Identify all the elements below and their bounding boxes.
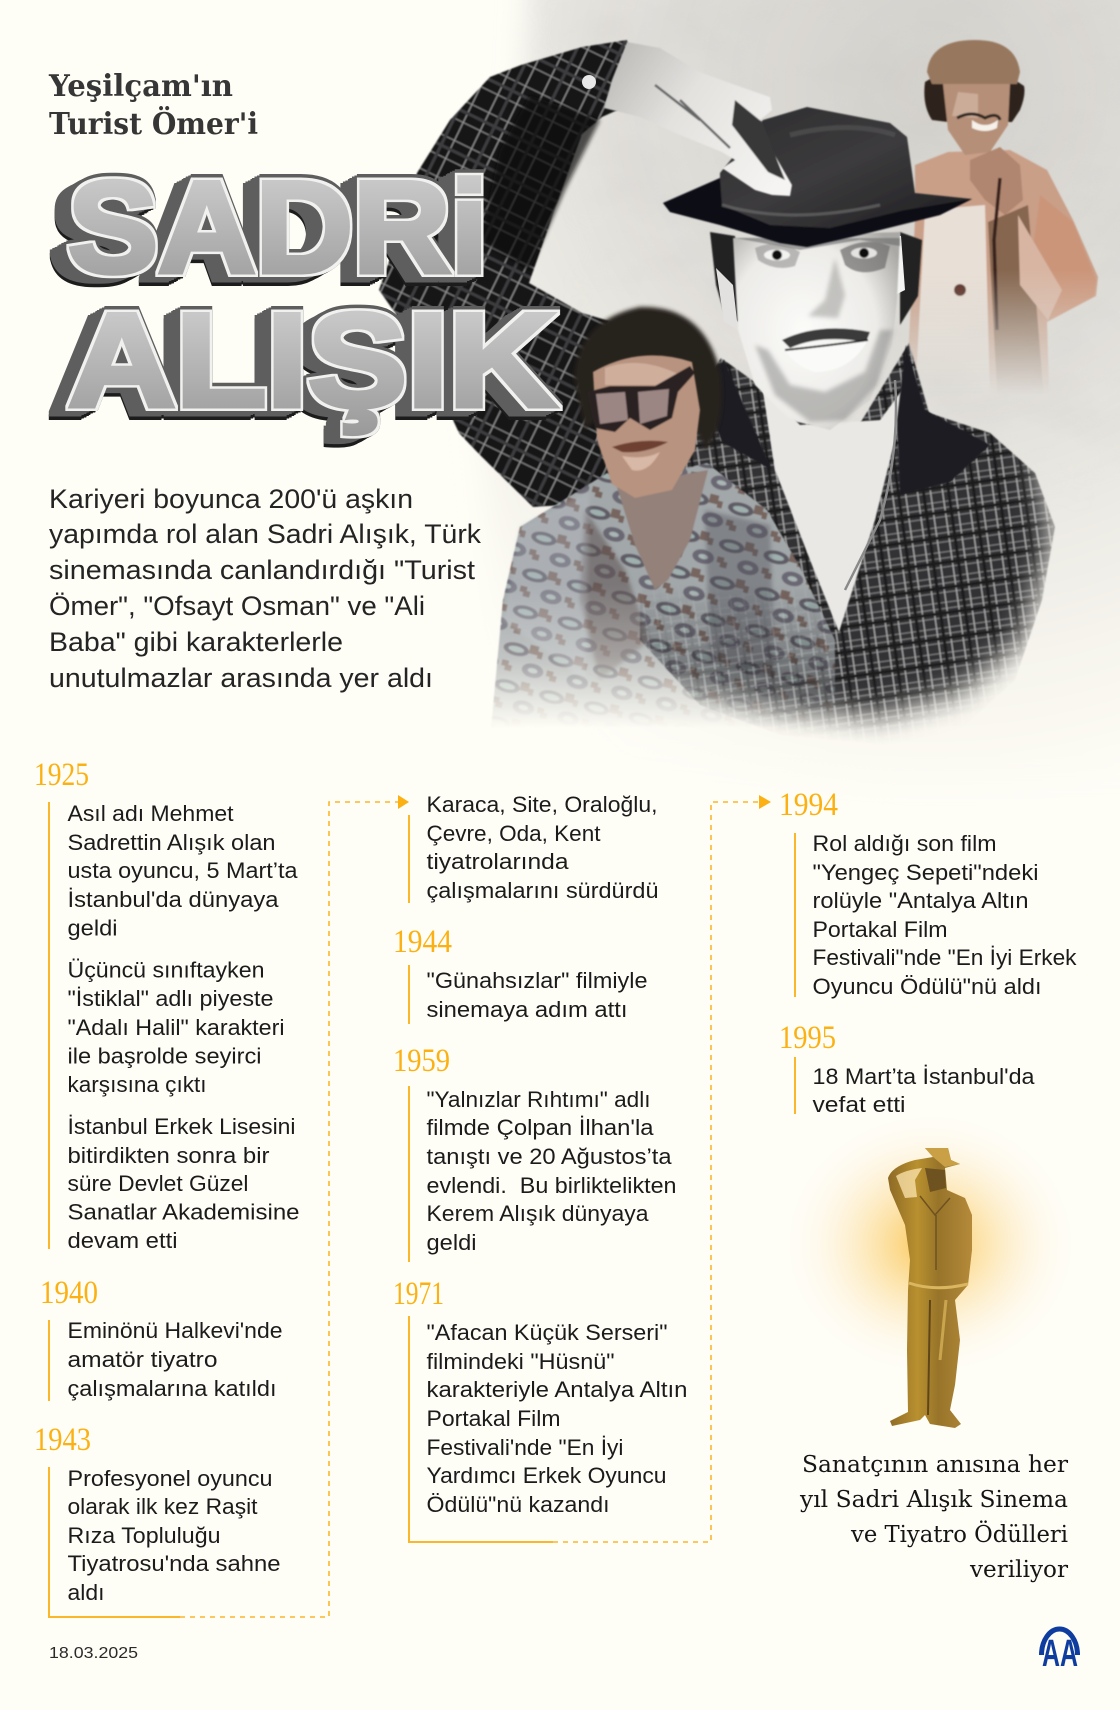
timeline entry 1995: vefat etti [812, 1092, 906, 1117]
timeline entry 1943: Profesyonel oyuncu [68, 1466, 272, 1491]
timeline continuation: theatres: tiyatrolarında [426, 849, 569, 874]
icon: AA logo: AA [1042, 1633, 1078, 1675]
timeline connector: column 1 to 2 [180, 795, 409, 1617]
raised arm sleeve [379, 40, 700, 507]
timeline entry 1943: aldı [68, 1580, 104, 1605]
timeline entry 1971: "Afacan Küçük Serseri" [426, 1320, 668, 1345]
timeline entry 1994: 1994 [779, 787, 838, 823]
award caption: Sanatçının anısına her [802, 1452, 1068, 1478]
timeline entry 1925: Sanatlar Akademisine [68, 1200, 300, 1224]
timeline continuation: theatres: Çevre, Oda, Kent [426, 821, 600, 846]
timeline entry 1925: "İstiklal" adlı piyeste [68, 986, 274, 1011]
timeline entry 1925: süre Devlet Güzel [68, 1171, 248, 1196]
heading [48, 69, 258, 142]
timeline entry 1971: karakteriyle Antalya Altın [426, 1377, 688, 1402]
timeline entry 1925: karşısına çıktı [68, 1072, 206, 1097]
timeline entry 1994: Oyuncu Ödülü"nü aldı [812, 974, 1042, 999]
timeline entry 1959 [393, 1043, 676, 1262]
timeline entry 1943: olarak ilk kez Raşit [68, 1494, 258, 1519]
timeline entry 1994: Festivali"nde "En İyi Erkek [812, 945, 1078, 970]
timeline entry 1959: evlendi. Bu birliktelikten [426, 1173, 676, 1198]
heading: Turist Ömer'i [49, 105, 258, 142]
timeline entry 1944 [393, 924, 648, 1024]
timeline entry 1940: 1940 [40, 1275, 98, 1311]
cuff button [582, 75, 596, 89]
timeline entry 1943: 1943 [34, 1422, 91, 1458]
timeline entry 1925: usta oyuncu, 5 Mart’ta [68, 858, 298, 883]
shadow inside sleeve [480, 95, 600, 270]
timeline entry 1959: geldi [426, 1230, 476, 1255]
intro paragraph: Baba" gibi karakterlerle [49, 627, 343, 657]
timeline entry 1959: tanıştı ve 20 Ağustos’ta [426, 1144, 672, 1169]
plaid torso [640, 343, 1055, 745]
icon: golden statuette [888, 1148, 972, 1428]
award caption: ve Tiyatro Ödülleri [850, 1521, 1068, 1548]
timeline entry 1971: 1971 [393, 1276, 444, 1312]
timeline entry 1940: Eminönü Halkevi'nde [68, 1318, 282, 1343]
icon: AA logo [1042, 1629, 1078, 1675]
timeline entry 1944: "Günahsızlar" filmiyle [426, 968, 648, 993]
timeline entry 1971: Festivali'nde "En İyi [426, 1435, 624, 1460]
title name: ALIŞIK [68, 287, 556, 435]
timeline entry 1994: Rol aldığı son film [812, 831, 996, 856]
intro paragraph: unutulmazlar arasında yer aldı [49, 663, 433, 693]
timeline entry 1995 [779, 1020, 1035, 1117]
shirt collars [700, 345, 990, 495]
intro paragraph: Kariyeri boyunca 200'ü aşkın [49, 484, 413, 514]
timeline entry 1940: amatör tiyatro [68, 1347, 218, 1372]
heading: Yeşilçam'ın [48, 69, 233, 104]
timeline entry 1940: çalışmalarına katıldı [68, 1376, 276, 1401]
photo: man with sunglasses and paisley shirt [490, 307, 835, 740]
timeline entry 1943: Rıza Topluluğu [68, 1523, 220, 1548]
timeline entry 1925: bitirdikten sonra bir [68, 1143, 270, 1168]
timeline entry 1995: 18 Mart’ta İstanbul'da [812, 1064, 1035, 1089]
title name: SADRi [68, 154, 488, 300]
timeline entry 1925: geldi [68, 916, 118, 940]
photo: singing man with cap, top right [905, 40, 1098, 420]
timeline entry 1925: devam etti [68, 1228, 178, 1253]
timeline entry 1943 [34, 1422, 280, 1617]
timeline entry 1994: rolüyle "Antalya Altın [812, 888, 1028, 913]
intro paragraph: sinemasında canlandırdığı "Turist [49, 555, 476, 585]
photo: main man with hat and plaid shirt [379, 40, 1055, 745]
timeline entry 1971: Portakal Film [426, 1406, 560, 1431]
timeline entry 1971: Ödülü"nü kazandı [426, 1492, 610, 1517]
timeline entry 1971: filmindeki "Hüsnü" [426, 1349, 614, 1374]
timeline entry 1925: Üçüncü sınıftayken [68, 958, 264, 982]
timeline entry 1925: Sadrettin Alışık olan [68, 830, 276, 855]
necklace [845, 380, 896, 590]
face [733, 232, 900, 430]
face [587, 355, 700, 498]
timeline entry 1925: 1925 [34, 757, 89, 793]
timeline entry 1925: İstanbul'da dünyaya [68, 887, 279, 912]
award caption: yıl Sadri Alışık Sinema [799, 1487, 1068, 1513]
timeline entry 1994: "Yengeç Sepeti"ndeki [812, 860, 1038, 885]
timeline entry 1943: Tiyatrosu'nda sahne [68, 1551, 280, 1576]
textured gray backdrop behind photos [503, 0, 1120, 666]
timeline connector: column 2 to 3 [553, 795, 771, 1542]
timeline entry 1995: 1995 [779, 1020, 836, 1056]
timeline entry 1944: sinemaya adım attı [426, 997, 628, 1022]
date: 18.03.2025 [49, 1645, 138, 1662]
intro paragraph: yapımda rol alan Sadri Alışık, Türk [49, 519, 482, 549]
open chest and neck [762, 385, 906, 632]
timeline entry 1940 [40, 1275, 282, 1401]
award statue with glow [780, 1109, 1080, 1428]
timeline entry 1925: İstanbul Erkek Lisesini [68, 1114, 296, 1139]
timeline entry 1959: "Yalnızlar Rıhtımı" adlı [426, 1087, 650, 1112]
award caption: veriliyor [969, 1557, 1068, 1583]
hand on hat [604, 42, 792, 196]
timeline entry 1944: 1944 [393, 924, 452, 960]
hair and ear [710, 232, 922, 325]
award caption [799, 1452, 1068, 1583]
timeline entry 1971: Yardımcı Erkek Oyuncu [426, 1463, 666, 1488]
timeline entry 1994 [779, 787, 1078, 999]
timeline continuation: theatres [408, 792, 658, 903]
timeline entry 1994: Portakal Film [812, 917, 948, 942]
intro paragraph [49, 484, 482, 693]
timeline entry 1925: "Adalı Halil" karakteri [68, 1015, 284, 1040]
timeline entry 1971 [393, 1276, 688, 1542]
timeline continuation: theatres: Karaca, Site, Oraloğlu, [426, 792, 658, 817]
hair [574, 307, 722, 450]
timeline entry 1959: 1959 [393, 1043, 450, 1079]
timeline entry 1925 [34, 757, 300, 1253]
timeline entry 1925: ile başrolde seyirci [68, 1044, 262, 1068]
hat [663, 107, 972, 247]
timeline entry 1959: Kerem Alışık dünyaya [426, 1201, 649, 1226]
title name [68, 154, 556, 435]
timeline continuation: theatres: çalışmalarını sürdürdü [426, 878, 658, 903]
intro paragraph: Ömer", "Ofsayt Osman" ve "Ali [49, 591, 425, 621]
timeline entry 1925: Asıl adı Mehmet [68, 801, 233, 826]
timeline entry 1959: filmde Çolpan İlhan'la [426, 1115, 654, 1140]
paisley shirt [490, 463, 835, 740]
